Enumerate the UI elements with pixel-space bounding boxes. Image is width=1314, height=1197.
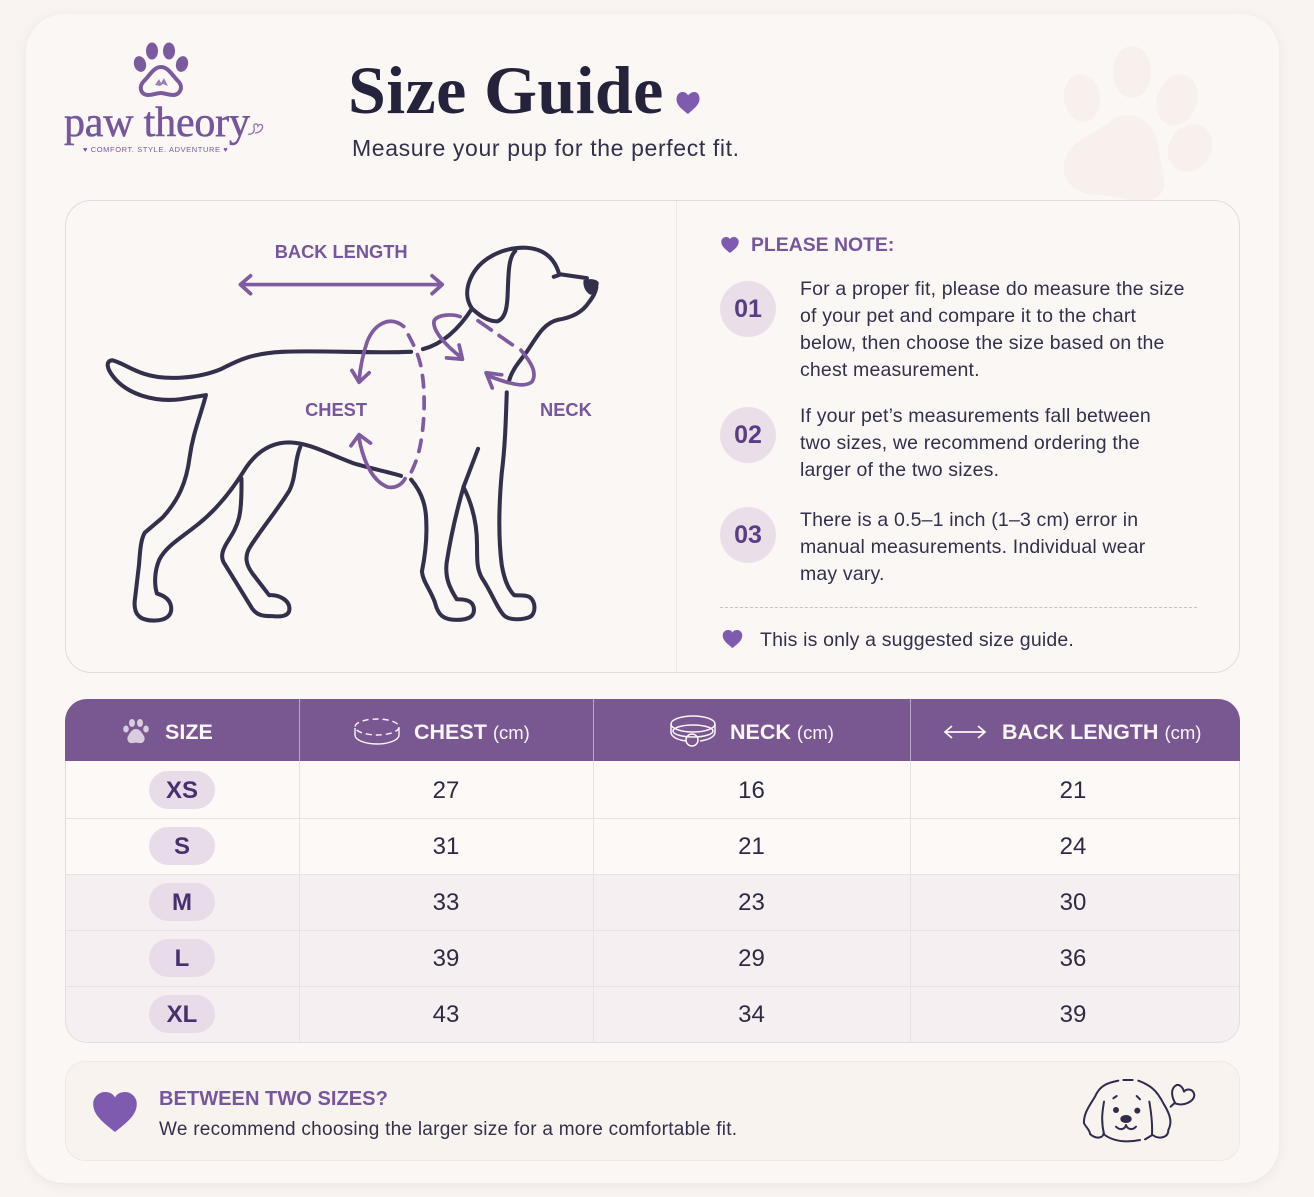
row S: S (174, 833, 190, 860)
icon: collar (670, 715, 716, 747)
note 03: manual measurements. Individual wear (800, 536, 1145, 558)
note 02: larger of the two sizes. (800, 459, 999, 481)
row L: 29 (738, 945, 765, 972)
icon: chest band (354, 718, 400, 745)
note 03: 03 (734, 521, 762, 549)
note 01: of your pet and compare it to the chart (800, 305, 1136, 327)
neck measure (434, 315, 534, 388)
note 02: If your pet’s measurements fall between (800, 405, 1151, 427)
header: back length: BACK LENGTH (cm) (1002, 720, 1201, 744)
row M: 23 (738, 889, 765, 916)
subtitle: Measure your pup for the perfect fit. (352, 135, 740, 161)
suggested size note: This is only a suggested size guide. (760, 629, 1074, 651)
note 01 (720, 278, 1185, 381)
label: back length: BACK LENGTH (275, 241, 408, 262)
row M: 30 (1060, 889, 1086, 916)
row XL: 43 (433, 1001, 459, 1028)
note 03: may vary. (800, 563, 885, 585)
row XS: 27 (433, 777, 459, 804)
watermark paw (1064, 46, 1212, 200)
header: neck: NECK (cm) (730, 720, 834, 744)
row L: 36 (1060, 945, 1086, 972)
header: size: SIZE (165, 720, 213, 744)
row S (149, 827, 1086, 865)
row S: 31 (433, 833, 459, 860)
note 02: two sizes, we recommend ordering the (800, 432, 1140, 454)
note 02 (720, 405, 1151, 481)
row M: M (172, 889, 192, 916)
dog measurement diagram (106, 241, 599, 623)
row XL: 39 (1060, 1001, 1086, 1028)
note 03 (720, 507, 1145, 585)
row XS (149, 771, 1086, 809)
panel: measurement and notes (65, 200, 1240, 673)
panel: between two sizes (65, 1061, 1240, 1161)
callout heading: BETWEEN TWO SIZES? (159, 1088, 388, 1110)
icon: large heart (93, 1092, 137, 1132)
notes heading: PLEASE NOTE: (751, 234, 894, 256)
logo tagline: ♥ COMFORT. STYLE. ADVENTURE ♥ (83, 145, 228, 154)
icon: double arrow (944, 725, 986, 739)
icon: heart (722, 630, 742, 648)
icon: dog nose (583, 279, 599, 295)
row XL (149, 995, 1086, 1033)
note 01: 01 (734, 295, 762, 323)
note 01: For a proper fit, please do measure the size (800, 278, 1185, 300)
icon: logo heart flourish (248, 123, 264, 135)
note 01: chest measurement. (800, 359, 980, 381)
label: neck: NECK (540, 399, 593, 420)
note 03: There is a 0.5–1 inch (1–3 cm) error in (800, 509, 1138, 531)
title: Size Guide (348, 52, 664, 128)
callout text: We recommend choosing the larger size for a more comfortable fit. (159, 1119, 737, 1140)
note 02: 02 (734, 421, 762, 449)
note 01: below, then choose the size based on the (800, 332, 1165, 354)
row L (149, 939, 1086, 977)
icon: logo paw (134, 42, 188, 97)
icon: puppy face with heart (1082, 1079, 1196, 1142)
size table (65, 699, 1240, 1043)
logo wordmark: paw theory (64, 100, 250, 146)
row XS: XS (166, 777, 198, 804)
row L: 39 (433, 945, 459, 972)
icon: header paw (123, 719, 149, 744)
icon: title heart (676, 92, 700, 114)
row S: 21 (738, 833, 765, 860)
row XS: 21 (1060, 777, 1086, 804)
row L: L (175, 945, 189, 972)
logo: paw theory (64, 42, 264, 154)
row M: 33 (433, 889, 459, 916)
label: chest: CHEST (305, 399, 367, 420)
back length arrow (240, 276, 442, 294)
row S: 24 (1060, 833, 1086, 860)
row M (149, 883, 1086, 921)
chest measure (351, 321, 424, 487)
row XL: XL (167, 1001, 197, 1028)
row XS: 16 (738, 777, 765, 804)
header: chest: CHEST (cm) (414, 720, 530, 744)
icon: heart (721, 237, 739, 253)
row XL: 34 (738, 1001, 765, 1028)
dog outline (108, 248, 596, 621)
